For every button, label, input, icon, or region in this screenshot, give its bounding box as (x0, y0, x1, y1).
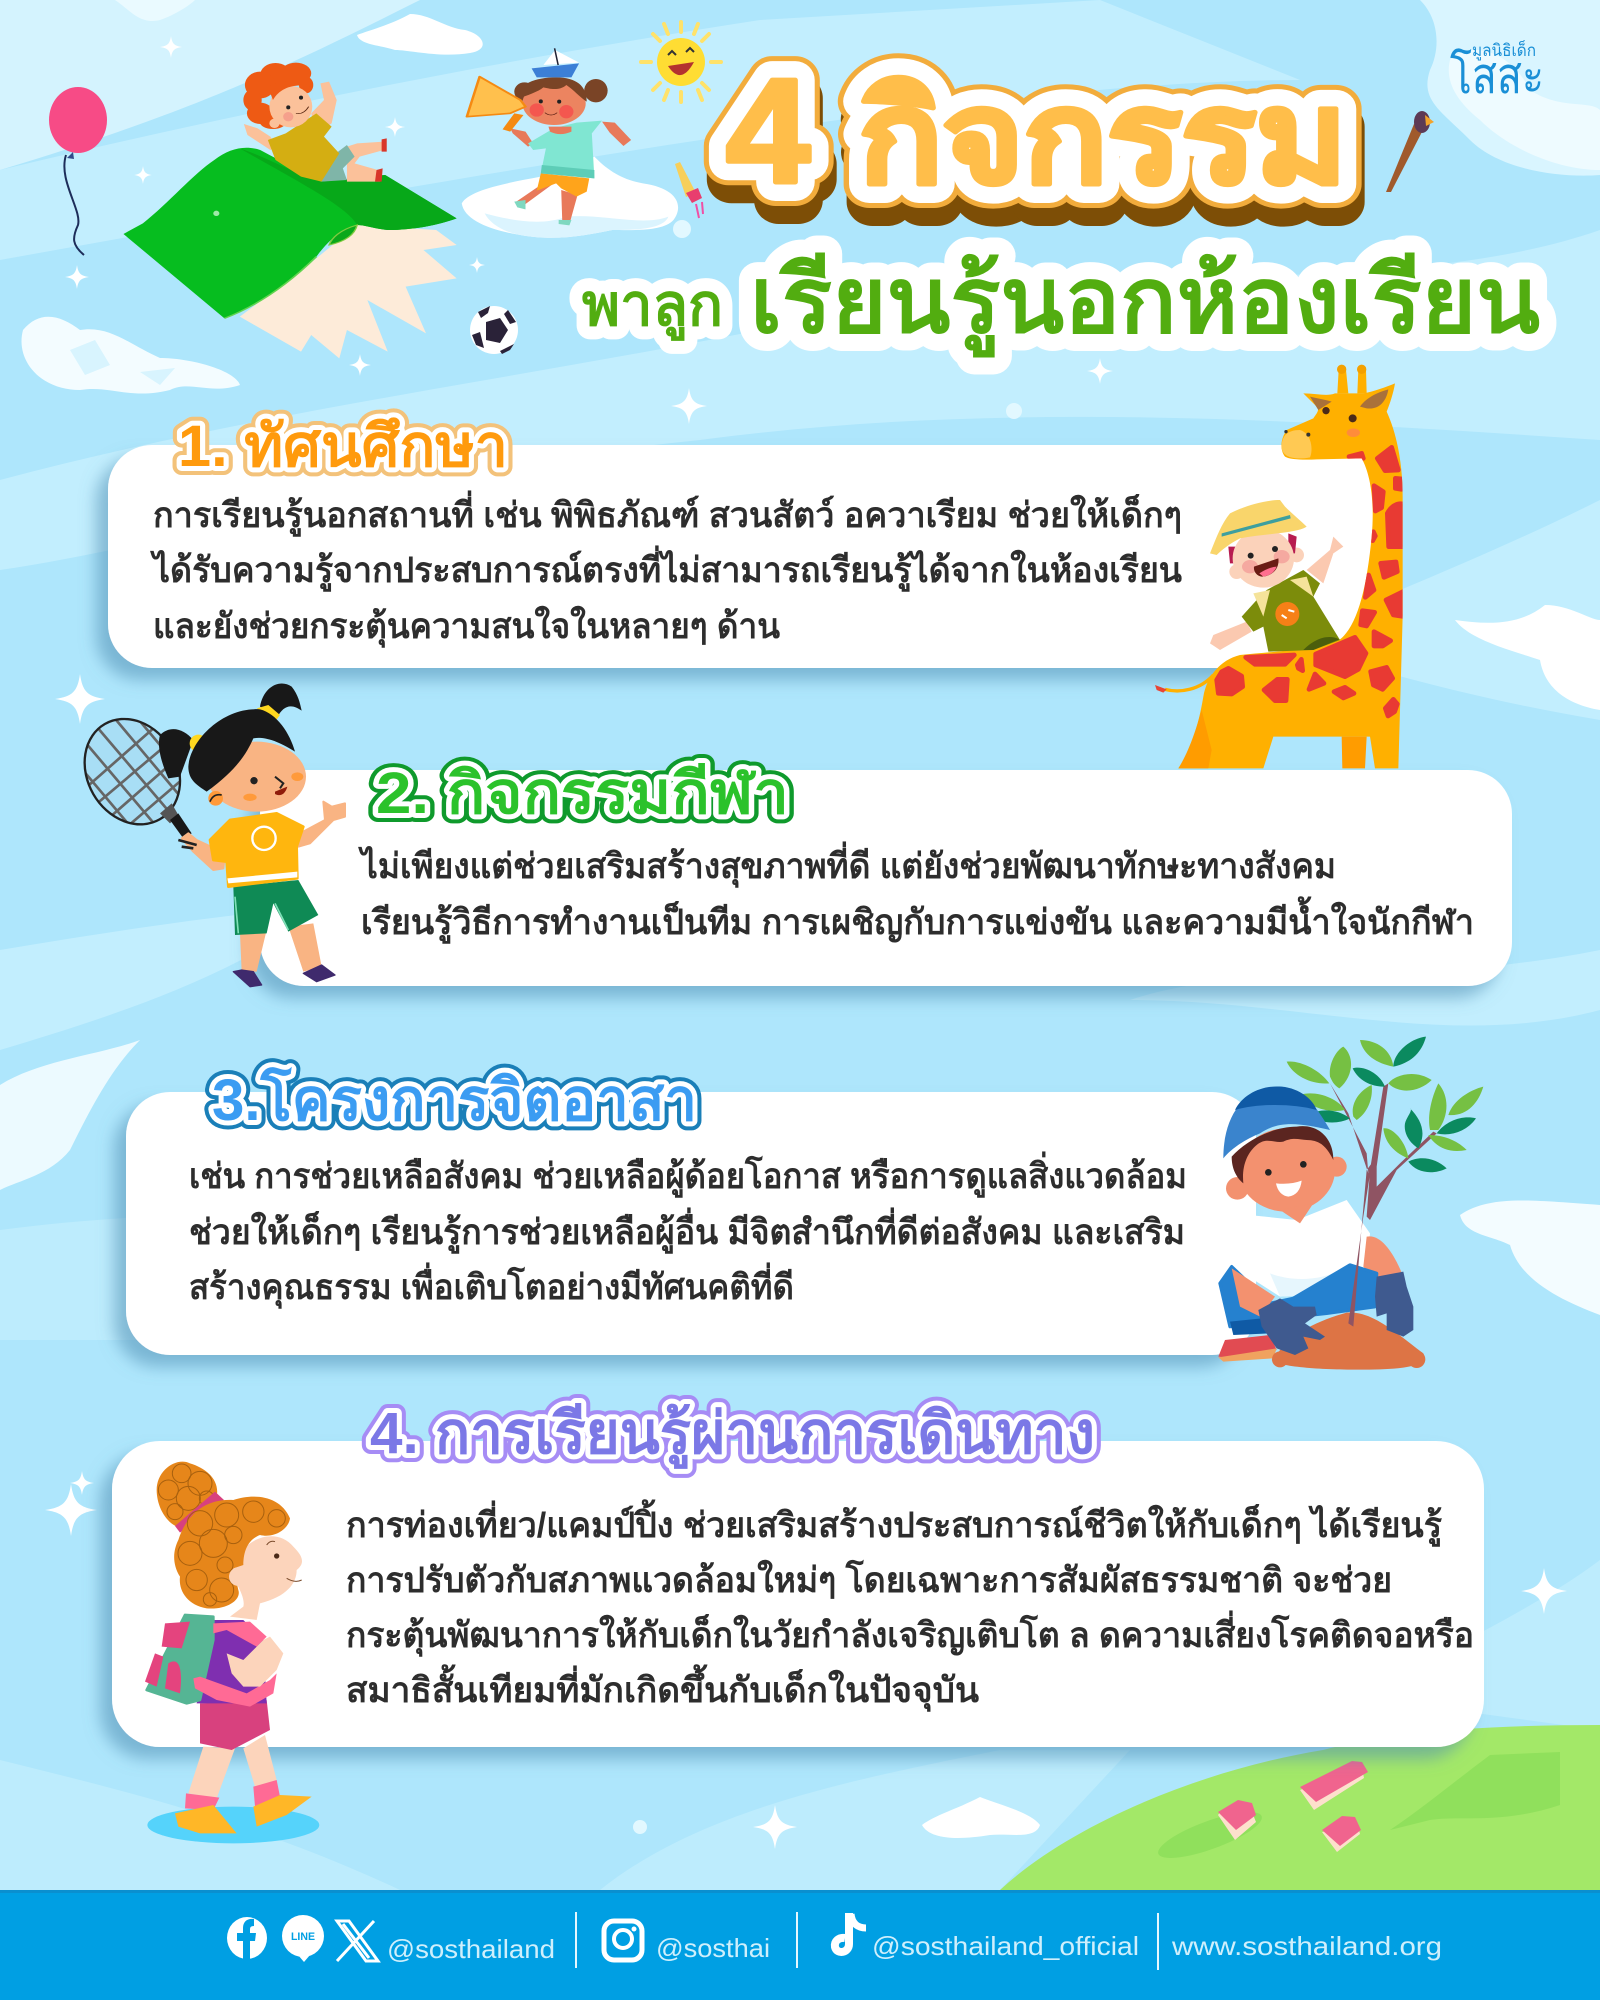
heading 1: 1. ทัศนศึกษา (178, 414, 508, 479)
illustration: flying green book (123, 148, 457, 358)
icon: instagram (604, 1921, 642, 1960)
icon: tiktok (835, 1913, 866, 1952)
heading 4: 4. การเรียนรู้ผ่านการเดินทาง (370, 1401, 1095, 1469)
text block 1 (149, 490, 1182, 648)
title: main heading: 4 (726, 49, 810, 214)
text block 4: การปรับตัวกับสภาพแวดล้อมใหม่ๆ โดยเฉพาะการสัมผัสธรรมชาติ จะช่วย (346, 1559, 1392, 1600)
text block 4 (346, 1499, 1474, 1712)
text block 1: การเรียนรู้นอกสถานที่ เช่น พิพิธภัณฑ์ สวนสัตว์ อควาเรียม ช่วยให้เด็กๆ (153, 490, 1182, 537)
heading 2: 2. กิจกรรมกีฬา (376, 761, 789, 826)
text block 2: เรียนรู้วิธีการทำงานเป็นทีม การเผชิญกับการแข่งขัน และความมีน้ำใจนักกีฬา (361, 896, 1474, 944)
heading 4: 4. การเรียนรู้ผ่านการเดินทาง (370, 1401, 1095, 1469)
brush (1386, 111, 1434, 192)
hill with houses (1000, 1725, 1600, 1890)
illustration: boy on book (243, 63, 387, 182)
title: main heading: กิจกรรม (859, 67, 1347, 210)
panel 1 (108, 445, 1388, 668)
panel 2 (260, 770, 1512, 986)
illustration: sun (641, 22, 721, 102)
text block 3: เช่น การช่วยเหลือสังคม ช่วยเหลือผู้ด้อยโอกาส หรือการดูแลสิ่งแวดล้อม (189, 1151, 1187, 1198)
illustration: curly girl with backpack (145, 1462, 319, 1843)
text block 4: กระตุ้นพัฒนาการให้กับเด็กในวัยกำลังเจริญเติบโต ล ดความเสี่ยงโรคติดจอหรือ (346, 1610, 1474, 1657)
handle: instagram: @sosthai (656, 1933, 770, 1963)
icon: house lower (1322, 1816, 1361, 1852)
text block 4: สมาธิสั้นเทียมที่มักเกิดขึ้นกับเด็กในปัจจุบัน (346, 1664, 979, 1712)
text block 3 (189, 1151, 1187, 1309)
handle: tiktok: @sosthailand_official (872, 1931, 1139, 1961)
icon: x (337, 1921, 378, 1961)
illustration: boy planting tree (1218, 1037, 1483, 1370)
handle: facebook/line/x: @sosthailand (387, 1934, 555, 1964)
illustration: giraffe with boy (1155, 365, 1405, 768)
title: main heading: กิจกรรม (859, 67, 1347, 210)
illustration: pencil rocket (675, 162, 703, 218)
logo: โสสะ (1450, 48, 1544, 104)
illustration: cheering girl with megaphone on cloud (462, 48, 678, 238)
heading 3: 3.โครงการจิตอาสา (212, 1065, 697, 1133)
title: main heading: กิจกรรม (859, 67, 1347, 210)
title: main heading: กิจกรรม (862, 85, 1350, 228)
text block 1: และยังช่วยกระตุ้นความสนใจในหลายๆ ด้าน (153, 605, 780, 648)
panel 4 (112, 1441, 1484, 1747)
illustration: girl with racket (66, 683, 345, 987)
text block 3: ช่วยให้เด็กๆ เรียนรู้การช่วยเหลือผู้อื่น มีจิตสำนึกที่ดีต่อสังคม และเสริม (189, 1207, 1185, 1254)
icon: facebook (227, 1917, 267, 1960)
title: main heading (726, 49, 1350, 232)
title: main heading: 4 (729, 67, 813, 232)
illustration: balloon (49, 87, 107, 255)
text block 2 (357, 841, 1474, 944)
illustration: soccer ball (470, 306, 518, 354)
text block 3: สร้างคุณธรรม เพื่อเติบโตอย่างมีทัศนคติที่ดี (189, 1262, 794, 1309)
icon: line (282, 1915, 324, 1962)
title: main heading: 4 (726, 49, 810, 214)
title: subtitle: พาลูก (582, 273, 723, 341)
icon: line: LINE (291, 1931, 315, 1943)
heading 2: 2. กิจกรรมกีฬา (376, 761, 789, 826)
icon: house small (1218, 1800, 1256, 1840)
text block 1: ได้รับความรู้จากประสบการณ์ตรงที่ไม่สามารถเรียนรู้ได้จากในห้องเรียน (149, 545, 1182, 592)
title: main heading: 4 (726, 49, 810, 214)
text block 2: ไม่เพียงแต่ช่วยเสริมสร้างสุขภาพที่ดี แต่ยังช่วยพัฒนาทักษะทางสังคม (357, 841, 1336, 888)
logo: มูลนิธิเด็ก (1472, 39, 1536, 61)
website: www.sosthailand.org (1171, 1931, 1442, 1961)
icon: house long (1300, 1761, 1368, 1810)
title: subtitle: เรียนรู้นอกห้องเรียน (750, 250, 1540, 358)
footer bar (0, 1890, 1600, 2000)
heading 1: 1. ทัศนศึกษา (178, 414, 508, 479)
heading 3: 3.โครงการจิตอาสา (212, 1065, 697, 1133)
panel 3 (126, 1092, 1256, 1355)
text block 4: การท่องเที่ยว/แคมป์ปิ้ง ช่วยเสริมสร้างประสบการณ์ชีวิตให้กับเด็กๆ ได้เรียนรู้ (346, 1499, 1442, 1547)
